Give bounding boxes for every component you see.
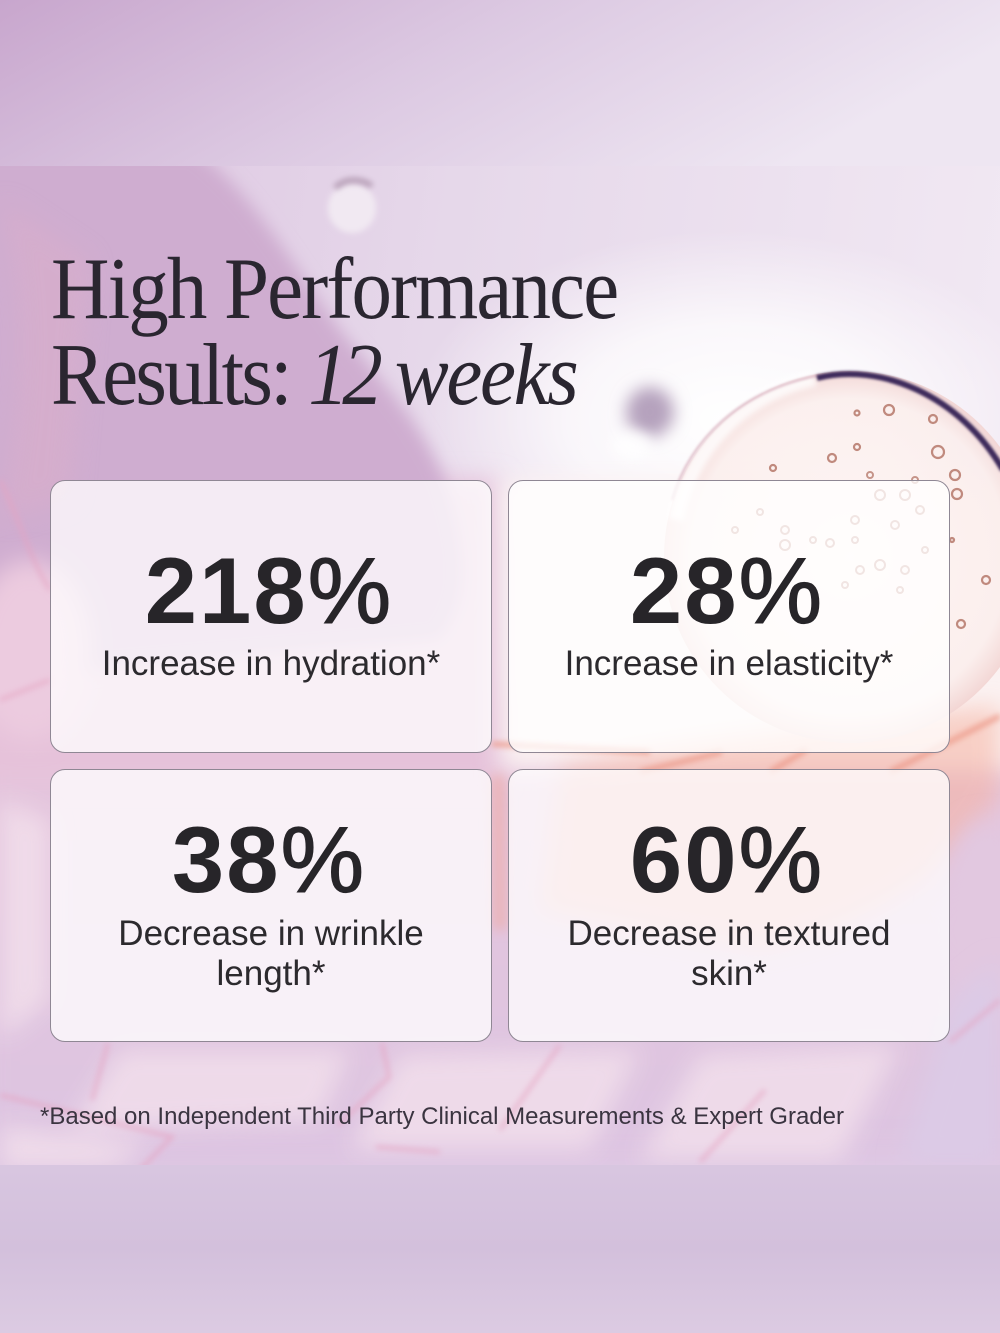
stat card: elasticity [508,480,950,753]
stat label: Decrease in textured [568,914,890,953]
stat label: Increase in hydration* [102,644,440,683]
serum bubble [675,369,1000,714]
pale cushions [0,800,900,1170]
peach petals behind right cards [556,698,1000,857]
stat label [568,914,890,993]
pink cushion seams [0,562,1000,1165]
stat label: skin* [691,954,767,993]
stat label: Decrease in wrinkle [118,914,424,953]
stat label: Increase in elasticity* [565,644,893,683]
lower cushions base [68,764,1000,1165]
title [51,241,617,424]
title: Results: 12 weeks [51,327,577,424]
stat value: 218% [145,538,393,643]
footnote: *Based on Independent Third Party Clinical Measurements & Expert Grader [40,1103,844,1130]
stat value: 60% [630,807,824,912]
stat card: textured skin [508,769,950,1042]
stat label: length* [216,954,325,993]
stat card: wrinkle length [50,769,492,1042]
stat card: hydration [50,480,492,753]
title: High Performance [51,241,617,338]
drop highlights [328,183,376,233]
white glow [458,264,973,480]
stat value: 38% [172,807,366,912]
stat value: 28% [630,538,824,643]
mauve dome [0,166,450,579]
stat label [118,914,424,993]
